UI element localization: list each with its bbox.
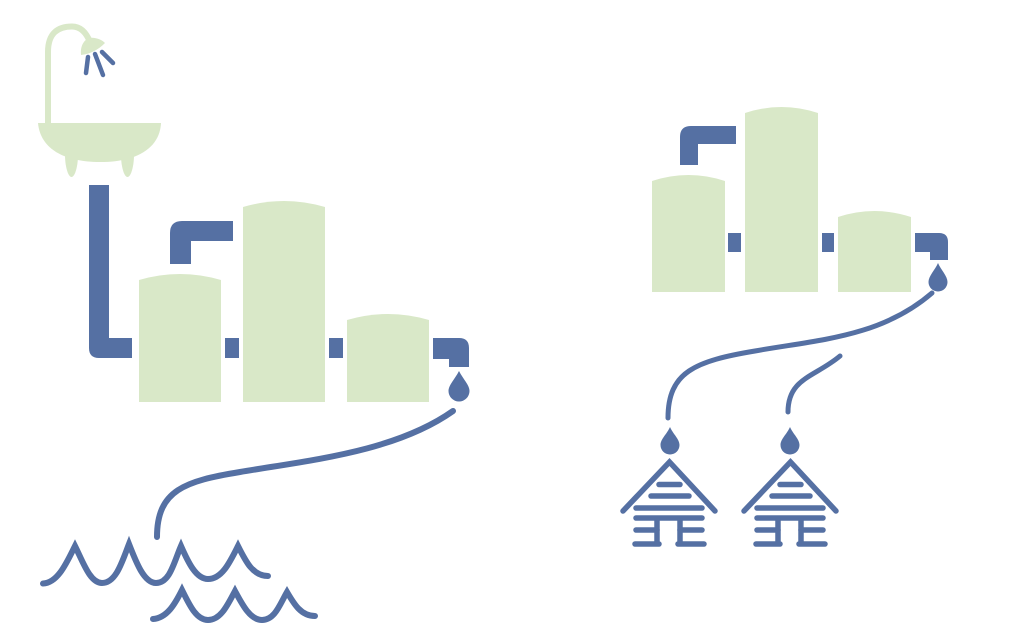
left hose to sea [157,411,453,537]
right connectors [728,233,834,252]
right top pipe [680,126,736,165]
left faucet [433,338,469,367]
left connectors [225,338,343,358]
icon: waves [43,544,315,620]
right faucet [915,233,948,260]
house drop 1 [660,427,680,454]
icon: house 2 [744,462,836,544]
right water drop [928,263,948,292]
right hoses to houses [668,293,932,418]
left top pipe [170,221,233,264]
left treatment tanks [139,201,429,402]
left water drop [448,371,470,402]
left inlet pipe [89,185,132,358]
house drop 2 [780,427,800,454]
icon: house 1 [623,462,715,544]
right treatment tanks [652,107,911,292]
icon: bathtub with shower [38,26,161,177]
